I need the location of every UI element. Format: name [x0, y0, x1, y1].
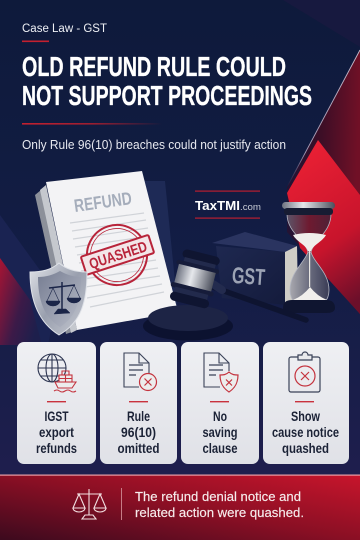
hero illustration	[30, 171, 335, 340]
label: Rule	[127, 408, 150, 424]
document heading REFUND: REFUND	[73, 188, 133, 216]
folder behind document	[142, 181, 178, 312]
label: 96(10)	[121, 424, 156, 440]
label	[202, 408, 238, 456]
label: clause	[202, 440, 238, 456]
brand: TaxTMI.com	[195, 190, 261, 219]
footer text	[135, 489, 304, 520]
brand: TaxTMI.com: .com	[240, 202, 261, 212]
eyebrow rule	[22, 40, 49, 42]
panel: Rule 96(10) omitted	[100, 342, 177, 464]
icon: clipboard with cross	[289, 352, 320, 392]
icon: document with cross	[124, 353, 156, 390]
brand: TaxTMI.com: TaxTMI	[195, 198, 240, 213]
label	[36, 408, 77, 456]
label: export	[39, 424, 74, 440]
footer text: The refund denial notice and	[135, 489, 301, 504]
subtitle: Only Rule 96(10) breaches could not justify action	[22, 137, 286, 152]
icon: scales of justice	[73, 489, 106, 519]
label: No	[213, 408, 227, 424]
panel: Show cause notice quashed	[263, 342, 349, 464]
label: quashed	[282, 440, 329, 456]
label: IGST	[44, 408, 69, 424]
document stack	[35, 171, 178, 334]
gavel handle	[213, 287, 306, 320]
panel: IGST export refunds	[17, 342, 96, 464]
shield with scales	[30, 263, 87, 335]
GST book block	[212, 232, 298, 305]
icon: document with shield	[204, 353, 238, 392]
gavel sound block	[143, 312, 233, 340]
stamp: QUASHED: QUASHED	[87, 238, 150, 273]
document text lines	[70, 213, 164, 307]
footer text: related action were quashed.	[135, 505, 304, 520]
label: Show	[291, 408, 320, 424]
label: omitted	[118, 440, 160, 456]
upper bulb	[287, 214, 331, 252]
gavel head	[167, 248, 223, 310]
label	[272, 408, 339, 456]
label: refunds	[36, 440, 77, 456]
stamp: QUASHED	[74, 215, 161, 294]
icon: globe and ship	[38, 354, 76, 392]
gavel	[143, 248, 306, 340]
title	[22, 51, 312, 111]
panel: No saving clause	[181, 342, 259, 464]
label	[118, 408, 160, 456]
label: saving	[202, 424, 238, 440]
hourglass	[282, 202, 335, 313]
lower bulb	[290, 252, 329, 301]
eyebrow: Case Law - GST: Case Law - GST	[22, 23, 107, 35]
label: cause notice	[272, 424, 339, 440]
GST book block: GST	[231, 262, 266, 290]
footer band	[0, 474, 360, 540]
